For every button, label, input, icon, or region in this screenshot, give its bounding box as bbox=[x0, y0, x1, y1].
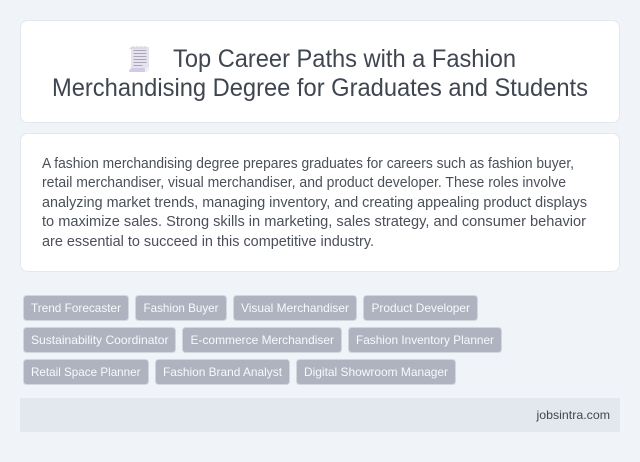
description text: to maximize sales. Strong skills in marketing, sales strategy, and consumer behavior bbox=[42, 214, 586, 230]
tag: E-commerce Merchandiser bbox=[182, 328, 342, 352]
tag: Digital Showroom Manager bbox=[296, 360, 456, 384]
description text: retail merchandiser, visual merchandiser, and product developer. These roles involve bbox=[42, 175, 566, 191]
description text: analyzing market trends, managing inventory, and creating appealing product displays bbox=[42, 195, 587, 211]
tag: Retail Space Planner: Retail Space Planner bbox=[31, 365, 141, 379]
tag: Fashion Brand Analyst bbox=[156, 360, 290, 384]
tag: Retail Space Planner bbox=[24, 360, 148, 384]
footer source: jobsintra.com bbox=[535, 408, 610, 422]
description text: are essential to succeed in this competitive industry. bbox=[42, 234, 374, 250]
icon: paper scroll bbox=[129, 46, 149, 72]
tag: Product Developer bbox=[364, 296, 478, 320]
description text: A fashion merchandising degree prepares graduates for careers such as fashion buyer, bbox=[42, 156, 574, 172]
tag: Fashion Inventory Planner bbox=[348, 328, 502, 352]
panel: title card bbox=[20, 20, 620, 122]
description text bbox=[42, 156, 587, 250]
tag: Fashion Brand Analyst: Fashion Brand Analyst bbox=[163, 365, 283, 379]
tags: career paths bbox=[24, 296, 502, 384]
title bbox=[52, 45, 588, 102]
tag: Product Developer: Product Developer bbox=[372, 301, 470, 315]
footer bar bbox=[20, 398, 620, 432]
tag: Fashion Buyer bbox=[136, 296, 226, 320]
tag: Sustainability Coordinator bbox=[24, 328, 176, 352]
tag: Trend Forecaster bbox=[24, 296, 128, 320]
tag: Digital Showroom Manager: Digital Showroom Manager bbox=[304, 365, 448, 379]
title: Merchandising Degree for Graduates and Students bbox=[52, 74, 588, 102]
tag: Visual Merchandiser: Visual Merchandiser bbox=[241, 301, 349, 315]
panel: description bbox=[20, 134, 620, 272]
title: Top Career Paths with a Fashion bbox=[173, 45, 516, 73]
tag: Sustainability Coordinator: Sustainability Coordinator bbox=[31, 333, 168, 347]
tag: Fashion Inventory Planner: Fashion Inventory Planner bbox=[356, 333, 494, 347]
tag: Trend Forecaster: Trend Forecaster bbox=[31, 301, 121, 315]
tag: E-commerce Merchandiser: E-commerce Merchandiser bbox=[190, 333, 334, 347]
tag: Visual Merchandiser bbox=[234, 296, 356, 320]
tag: Fashion Buyer: Fashion Buyer bbox=[144, 301, 219, 315]
